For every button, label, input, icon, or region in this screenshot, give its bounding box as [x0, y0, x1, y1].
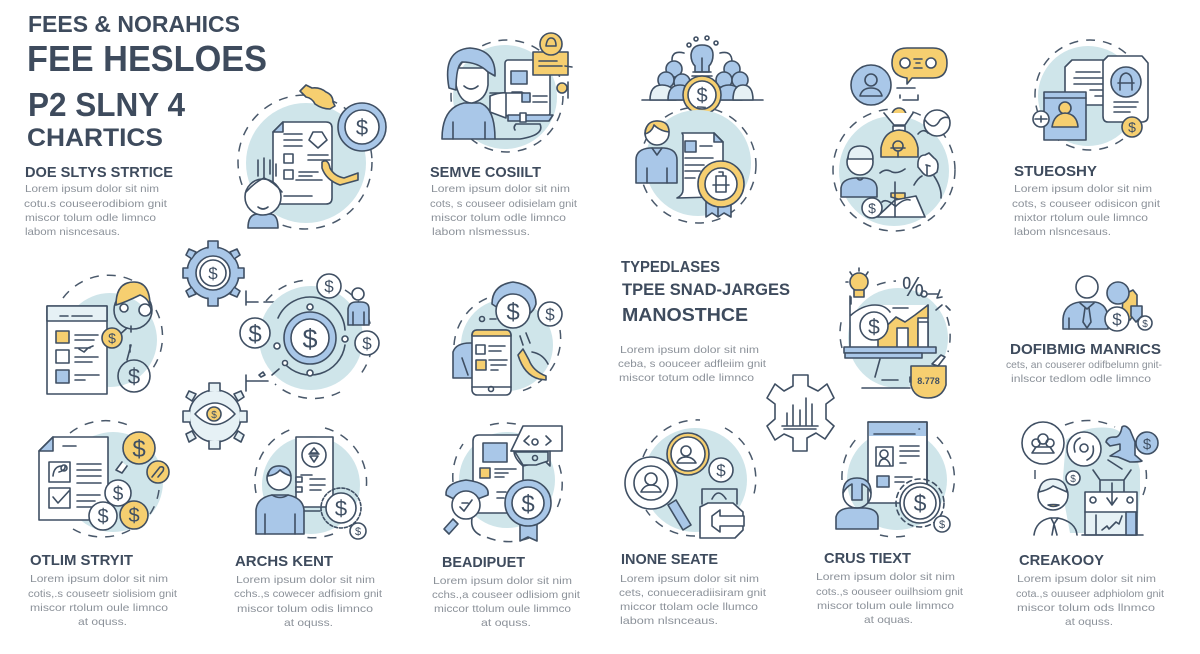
icon: person with web page and gear — [836, 422, 954, 537]
icon: yellow coin — [540, 33, 562, 55]
panel: otlim stryit — [28, 421, 177, 628]
panel: semve cosiilt: SEMVE COSIILT — [430, 164, 541, 181]
panel: doe sltys strtice text: DOE SLTYS STRTICE — [25, 164, 173, 181]
icon: coin: $ — [1112, 310, 1122, 329]
panel: stueoshy — [1012, 40, 1160, 238]
panel: semve cosiilt: cots, s couseer odisielam gnit — [430, 198, 577, 210]
panel: typedlases heading and text: ceba, s oouceer adfleiim gnit — [618, 358, 766, 370]
title block — [27, 11, 267, 152]
icon: pale gear with eye: $ — [211, 410, 217, 421]
panel: archs kent: miscor tolum odis limnco — [237, 603, 373, 615]
panel: archs kent: at oquss. — [284, 617, 333, 629]
icon: magnifier with check — [444, 480, 488, 535]
panel: inone seate: INONE SEATE — [621, 551, 718, 568]
icon: machine with chart — [1082, 470, 1143, 535]
icon: avatar — [851, 65, 891, 105]
panel: stueoshy: labom nlsncesaus. — [1014, 226, 1111, 238]
panel: typedlases heading and text: Lorem ipsum dolor sit nim — [620, 344, 759, 356]
icon: small coin: $ — [1142, 319, 1148, 330]
icon: people, scale and machine — [1022, 420, 1158, 535]
icon: meeting with avatar, speech bubble and people — [833, 48, 955, 231]
icon: person with document — [442, 33, 572, 152]
icon: coin — [862, 198, 882, 218]
icon: yellow and white mountain — [877, 182, 925, 217]
icon: monitor with growth chart — [840, 268, 950, 398]
panel: doe sltys strtice text: cotu.s couseerodibiom gnit — [24, 198, 167, 210]
icon: blue coin: $ — [128, 364, 140, 389]
panel: doe sltys strtice text: labom nisncesaus. — [25, 226, 120, 238]
icon: badge — [698, 161, 744, 217]
icon: right person — [914, 153, 941, 198]
panel: crus tiext — [816, 422, 963, 626]
icon: scale and coin: $ — [1143, 436, 1152, 453]
panel: typedlases heading and text: TYPEDLASES — [621, 259, 720, 276]
icon: person smiling — [1034, 479, 1077, 535]
panel: stueoshy: STUEOSHY — [1014, 163, 1097, 180]
icon: phone — [472, 330, 511, 395]
panel: semve cosiilt: labom nlsmessus. — [432, 226, 530, 238]
panel: semve cosiilt: miscor tolum odle limnco — [431, 212, 566, 224]
icon: yellow coin: $ — [108, 330, 116, 346]
icon: small yellow coin — [147, 461, 169, 483]
icon: right group — [716, 61, 753, 100]
icon: coin right: $ — [362, 334, 372, 353]
icon: headset person — [836, 478, 878, 529]
panel: creakooy: miscor tolum ods llnmco — [1017, 602, 1155, 614]
panel: dofibmig manrics: inlscor tedlom odle limnco — [1011, 373, 1151, 385]
icon: yellow figure — [881, 108, 918, 157]
icon: coin: $ — [868, 316, 880, 339]
icon: percent: % — [902, 271, 924, 302]
icon: small coin: $ — [545, 305, 555, 324]
icon: team with light bulb and coin — [636, 36, 763, 223]
icon: small chart circle — [918, 110, 950, 136]
icon: central coin ring with orbit: $ — [302, 324, 318, 354]
panel: beadipuet: cchs.,a couseer odlisiom gnit — [432, 589, 580, 601]
icon: gear coin: $ — [914, 490, 927, 516]
panel: typedlases heading and text: TPEE SNAD-JARGES — [622, 280, 790, 299]
panel: inone seate: labom nlsnceaus. — [620, 615, 718, 627]
icon: yellow profile ring — [667, 433, 709, 475]
panel: crus tiext: at oquas. — [864, 614, 913, 626]
panel: typedlases heading and text — [618, 259, 790, 384]
icon: white coin: $ — [113, 484, 124, 505]
icon: network circle — [1067, 432, 1101, 466]
panel: otlim stryit: Lorem ipsum dolor sit nim — [30, 573, 168, 585]
icon: yellow handset — [518, 333, 548, 380]
panel: dofibmig manrics — [1006, 276, 1162, 385]
icon: coin top: $ — [324, 277, 334, 296]
icon: light bulb — [672, 36, 732, 76]
panel: crus tiext: Lorem ipsum dolor sit nim — [816, 571, 955, 583]
panel: typedlases heading and text: miscor totum odle limnco — [619, 372, 754, 384]
panel: beadipuet: at oquss. — [481, 617, 531, 629]
panel: typedlases heading and text: MANOSTHCE — [622, 305, 748, 325]
panel: doe sltys strtice text — [24, 164, 173, 238]
icon: coin — [683, 76, 721, 114]
icon: person — [256, 466, 304, 534]
icon: bulb — [846, 268, 868, 304]
panel: doe sltys strtice text: miscor tolum odle limnco — [25, 212, 156, 224]
icon: documents and id card — [1033, 40, 1148, 150]
icon: pale gear with eye — [183, 383, 247, 449]
title block: FEE HESLOES — [27, 38, 267, 79]
icon: document with magnifier and badge — [444, 423, 562, 542]
icon: document with coins — [39, 421, 169, 537]
icon: checklist window with person — [47, 275, 163, 394]
icon: coin: $ — [716, 461, 726, 480]
icon: yellow coin lower: $ — [128, 505, 140, 527]
icon: speech bubble — [892, 48, 947, 84]
panel: otlim stryit: miscor rtolum oule limnco — [30, 602, 168, 614]
panel: inone seate: cets, conueceradiisiram gnit — [619, 587, 766, 599]
panel: stueoshy: cots, s couseer odisicon gnit — [1012, 198, 1160, 210]
icon: small coin: $ — [355, 526, 361, 538]
panel: crus tiext: miscor tolum oule limmco — [817, 600, 954, 612]
icon: gear coin: $ — [506, 299, 520, 326]
icon: blue badge coin: $ — [521, 491, 535, 518]
icon: business people with coins — [1063, 276, 1152, 331]
icon: small coin: $ — [939, 519, 945, 531]
panel: semve cosiilt: Lorem ipsum dolor sit nim — [431, 183, 570, 195]
panel: otlim stryit: cotis,.s couseetr siolisiom gnit — [28, 588, 177, 600]
icon: gear coin: $ — [335, 496, 347, 521]
icon: coin — [338, 103, 386, 151]
panel: doe sltys strtice text: Lorem ipsum dolor sit nim — [25, 183, 159, 195]
icon: coin: $ — [1070, 474, 1076, 485]
panel: creakooy: CREAKOOY — [1019, 552, 1104, 569]
panel: beadipuet: miccor ttolum oule limmco — [434, 603, 571, 615]
panel: semve cosiilt — [430, 33, 577, 238]
icon: white coin lower: $ — [97, 506, 109, 528]
icon: speech bubble — [511, 426, 562, 466]
panel: dofibmig manrics: cets, an couserer odifbelumn gnit- — [1006, 359, 1162, 371]
icon: small person — [348, 288, 369, 325]
title block: FEES & NORAHICS — [28, 11, 240, 37]
icon: yellow note — [533, 52, 572, 75]
icon: coin: $ — [1128, 119, 1136, 135]
icon: coin: $ — [868, 200, 876, 216]
icon: team circle — [1022, 422, 1064, 464]
panel: archs kent: Lorem ipsum dolor sit nim — [236, 574, 375, 586]
panel: inone seate: Lorem ipsum dolor sit nim — [620, 573, 759, 585]
panel: creakooy: at oquss. — [1065, 616, 1113, 628]
panel: creakooy: cota.,s ouuseer adphiolom gnit — [1016, 588, 1164, 600]
panel: otlim stryit: at oquss. — [78, 616, 127, 628]
panel: inone seate — [619, 420, 766, 627]
icon: magnifier over profiles — [625, 420, 756, 538]
icon: blue gear with coin: $ — [208, 264, 218, 283]
panel: archs kent — [234, 428, 382, 629]
icon: yellow bag with number: 8.778 — [917, 376, 940, 386]
panel: stueoshy: Lorem ipsum dolor sit nim — [1014, 183, 1152, 195]
panel: crus tiext: CRUS TIEXT — [824, 550, 911, 567]
title block: CHARTICS — [27, 124, 163, 152]
panel: creakooy — [1016, 420, 1164, 628]
panel: inone seate: miccor ttolam ocle llumco — [620, 601, 758, 613]
title block: P2 SLNY 4 — [28, 86, 186, 123]
panel: crus tiext: cots.,s oouseer ouilhsiom gnit — [816, 586, 963, 598]
panel: stueoshy: mixtor rtolum oule limnco — [1014, 212, 1148, 224]
icon: yellow coin top: $ — [132, 436, 146, 463]
icon: phone with coin — [453, 282, 562, 395]
icon: coin left: $ — [248, 321, 262, 348]
panel: creakooy: Lorem ipsum dolor sit nim — [1017, 573, 1156, 585]
panel: archs kent: cchs.,s cowecer adfisiom gnit — [234, 588, 382, 600]
icon: left group — [650, 61, 692, 100]
icon: arrow lower — [246, 369, 279, 391]
icon: person with yellow hair — [114, 282, 152, 360]
icon: person with document and gear coin — [255, 428, 367, 539]
panel: beadipuet — [432, 423, 580, 629]
icon: coin: $ — [696, 85, 708, 107]
icon: person — [245, 178, 282, 228]
panel: beadipuet: BEADIPUET — [442, 554, 525, 571]
icon: arrow upper — [246, 291, 284, 309]
icon: magnifier — [625, 457, 691, 530]
panel: beadipuet: Lorem ipsum dolor sit nim — [433, 575, 572, 587]
icon: coin: $ — [356, 115, 368, 140]
panel: archs kent: ARCHS KENT — [235, 553, 333, 570]
icon: document with coin and phone — [238, 85, 386, 229]
panel: dofibmig manrics: DOFIBMIG MANRICS — [1010, 341, 1161, 358]
panel: otlim stryit: OTLIM STRYIT — [30, 552, 133, 569]
icon: left person — [841, 146, 877, 197]
icon: blue gear with coin — [183, 241, 244, 306]
icon: gear with bar chart — [767, 375, 834, 451]
icon: box with arrow — [700, 489, 744, 538]
icon: central coin ring with orbit — [240, 274, 379, 398]
